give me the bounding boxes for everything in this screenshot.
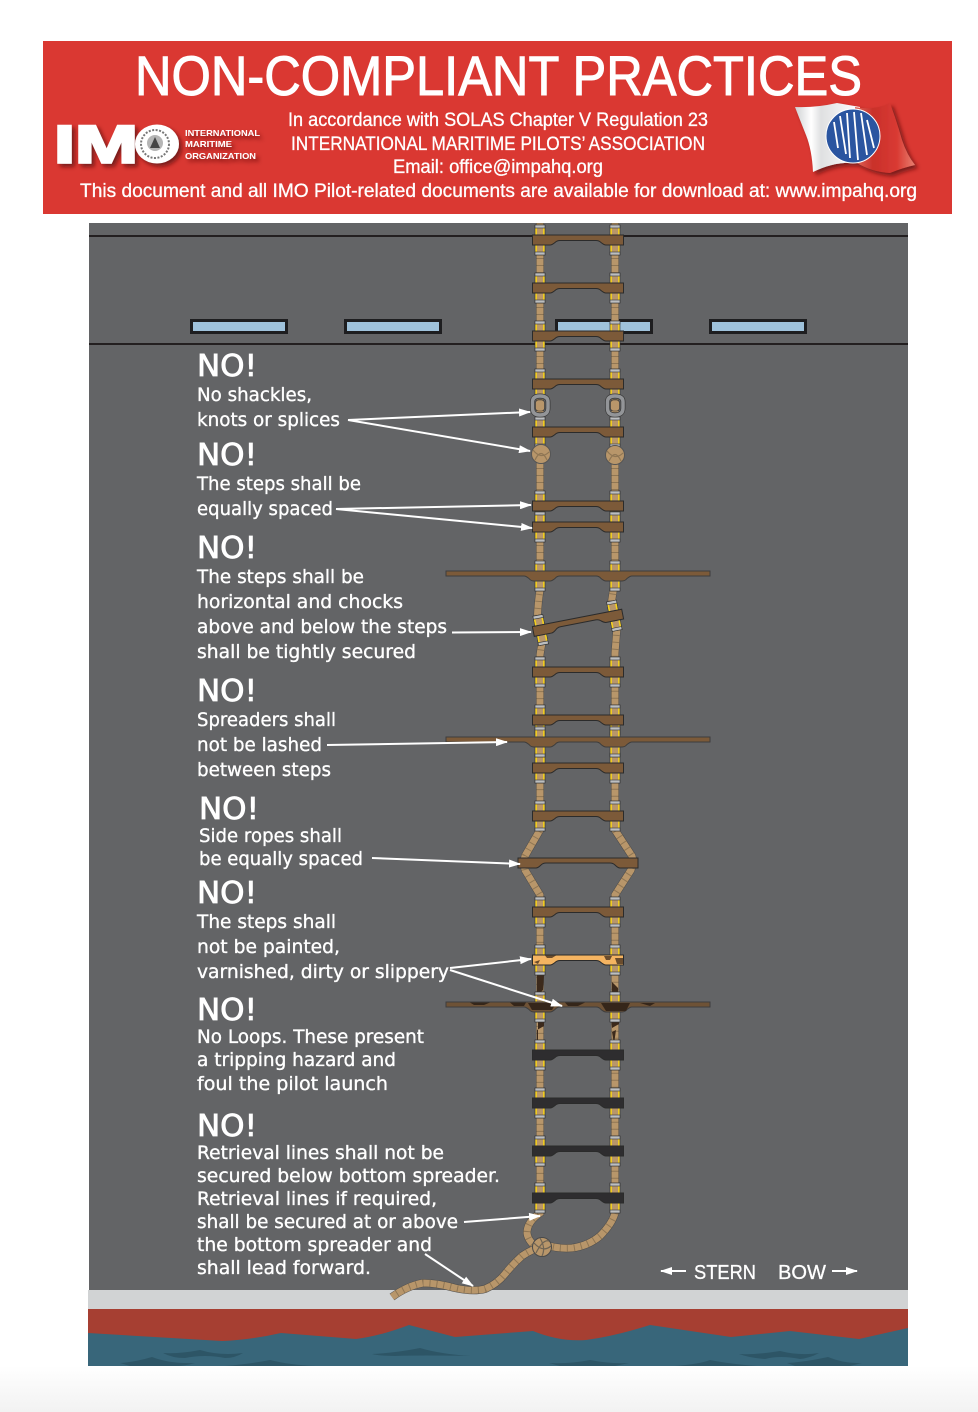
text block: spreaders: not be lashed (197, 734, 322, 756)
icon: IMPA flag (795, 103, 915, 173)
direction label: bow (778, 1262, 857, 1284)
header text: email: Email: office@impahq.org (393, 157, 603, 178)
text block: shackles: NO! (197, 349, 257, 384)
rope knot in retrieval line (532, 1238, 552, 1256)
spreader lashed between steps (446, 727, 710, 757)
text block: side ropes: NO! (199, 792, 259, 827)
header text: association: INTERNATIONAL MARITIME PILOTS’ ASSOCIATION (291, 134, 705, 155)
text block: side ropes: Side ropes shall (199, 825, 342, 847)
left shackle (532, 396, 548, 415)
red hull band (88, 1309, 908, 1366)
arrow: to wide step (372, 858, 520, 864)
text block: retrieval lines: Retrieval lines if required, (197, 1188, 437, 1210)
text block: horizontal: NO! (197, 531, 257, 566)
arrow: to painted step (450, 959, 531, 968)
text block: side ropes: be equally spaced (199, 848, 363, 870)
right knot (606, 446, 624, 464)
arrow: to step spacing upper (336, 505, 531, 509)
black slippery steps (532, 1040, 624, 1213)
painted step (532, 945, 624, 975)
direction label: bow: BOW (778, 1262, 826, 1284)
arrow: to knot (348, 420, 530, 451)
text block: retrieval lines: Retrieval lines shall not be (197, 1142, 444, 1164)
text block: equally spaced: NO! (197, 438, 257, 473)
icon: IMO logo: MARITIME (185, 139, 232, 149)
page background fade (0, 1366, 978, 1412)
text block: painted (196, 876, 449, 983)
arrow: to trailing line (425, 1254, 473, 1286)
dirty rope stains (537, 975, 619, 1046)
text block: loops (197, 993, 424, 1095)
direction label: stern: STERN (694, 1262, 756, 1284)
text block: equally spaced: equally spaced (197, 498, 333, 520)
arrow: to shackle (348, 412, 530, 420)
title: NON-COMPLIANT PRACTICES (135, 44, 862, 107)
arrow: to dirty spreader (450, 970, 562, 1006)
window 1 (192, 320, 286, 332)
ship hull (89, 223, 908, 1290)
header text: download note: This document and all IMO Pilot-related documents are available for download at: www.impahq.org (80, 181, 917, 202)
wide step with uneven side ropes (518, 858, 638, 868)
left knot (532, 444, 550, 464)
arrow: to lashed spreader (327, 742, 507, 745)
text block: horizontal: horizontal and chocks (197, 591, 403, 613)
tilted step (530, 599, 626, 646)
text block: retrieval lines: shall lead forward. (197, 1257, 371, 1279)
window 3 (556, 320, 652, 332)
arrow: to bottom spreader (464, 1216, 540, 1222)
text block: painted: not be painted, (197, 936, 340, 958)
text block: horizontal (196, 531, 447, 663)
sea (88, 1325, 908, 1366)
arrow: to step spacing lower (336, 509, 532, 528)
icon: IMO logo (54, 116, 260, 174)
text block: loops: foul the pilot launch (197, 1073, 388, 1095)
right shackle (608, 396, 623, 415)
spreader top (446, 561, 710, 591)
header banner (43, 41, 952, 214)
text block: loops: NO! (197, 993, 257, 1028)
text block: spreaders: between steps (197, 759, 331, 781)
text block: painted: varnished, dirty or slippery (197, 961, 449, 983)
text block: side ropes (199, 792, 363, 870)
ladder steps (532, 225, 624, 927)
deck strip (88, 1290, 908, 1309)
direction label: stern (661, 1262, 756, 1284)
icon: IMO logo: ORGANIZATION (185, 151, 256, 161)
text block: retrieval lines: NO! (197, 1109, 257, 1144)
text block: retrieval lines: shall be secured at or above (197, 1211, 458, 1233)
text block: spreaders: Spreaders shall (197, 709, 336, 731)
ladder side ropes and retrieval loop (392, 223, 633, 1297)
icon: IMO logo: INTERNATIONAL (185, 128, 260, 138)
text block: retrieval lines: secured below bottom spreader. (197, 1165, 500, 1187)
window 4 (710, 320, 806, 332)
header text: regulation: In accordance with SOLAS Chapter V Regulation 23 (288, 110, 708, 131)
text block: retrieval lines (197, 1109, 500, 1279)
arrow: to tilted step (452, 631, 531, 634)
text block: painted: NO! (197, 876, 257, 911)
icon: IMO logo: IM (54, 116, 138, 174)
text block: spreaders: NO! (197, 674, 257, 709)
text block: shackles (197, 349, 340, 431)
text block: horizontal: above and below the steps (197, 616, 447, 638)
text block: retrieval lines: the bottom spreader and (197, 1234, 432, 1256)
text block: equally spaced (196, 438, 361, 520)
text block: shackles: No shackles, (197, 384, 312, 406)
text block: horizontal: shall be tightly secured (197, 641, 416, 663)
text block: painted: The steps shall (196, 911, 336, 933)
window 2 (346, 320, 440, 332)
text block: loops: No Loops. These present (197, 1026, 424, 1048)
text block: shackles: knots or splices (197, 409, 340, 431)
text block: loops: a tripping hazard and (197, 1049, 396, 1071)
text block: horizontal: The steps shall be (196, 566, 364, 588)
text block: spreaders (197, 674, 336, 781)
text block: equally spaced: The steps shall be (196, 473, 361, 495)
dirty spreader (446, 992, 710, 1022)
